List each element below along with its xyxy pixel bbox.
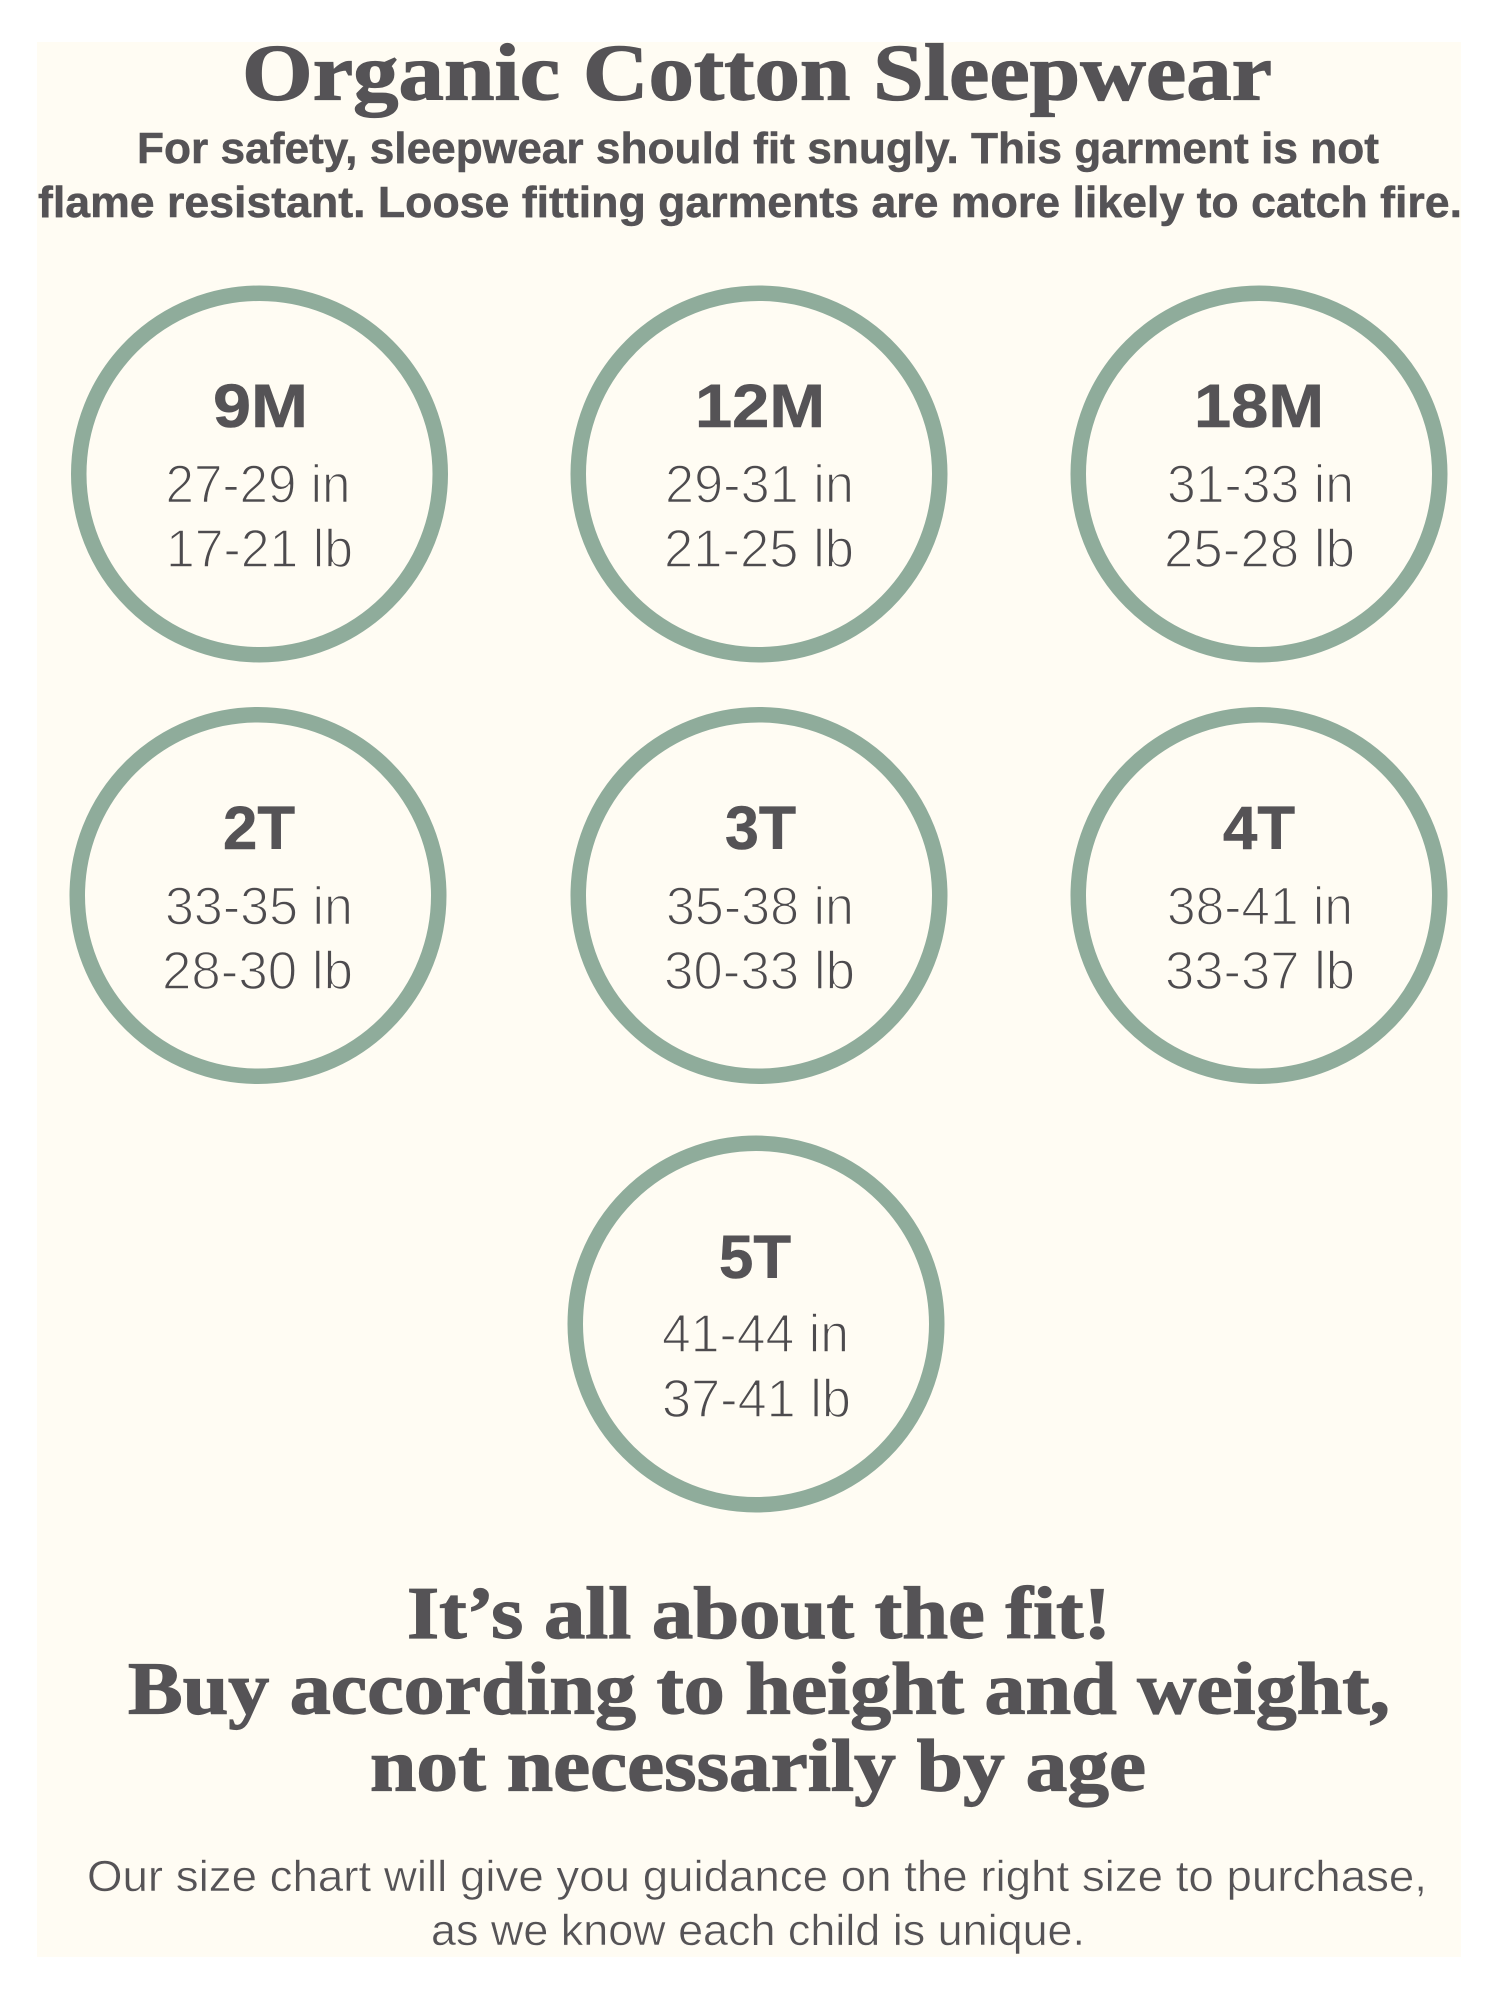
- size circle: 2T: 33-35 in: [165, 876, 353, 936]
- size circle: 18M: 31-33 in: [1167, 454, 1354, 514]
- size circle: 5T: [575, 1143, 937, 1505]
- size circle: 5T: 5T: [719, 1223, 791, 1291]
- size circle: 4T: 38-41 in: [1167, 876, 1353, 936]
- size circle: 12M: 12M: [695, 372, 825, 440]
- size circle: 5T: 37-41 lb: [662, 1369, 851, 1429]
- size circle: 5T: 41-44 in: [662, 1304, 849, 1364]
- size circle: 9M: 17-21 lb: [166, 519, 353, 579]
- size circle: 9M: 27-29 in: [166, 454, 350, 514]
- size circle: 3T: 30-33 lb: [664, 941, 855, 1001]
- size circle: 18M: [1078, 293, 1440, 655]
- size circle: 2T: [77, 715, 439, 1076]
- fit heading: not necessarily by age: [370, 1726, 1146, 1808]
- size chart guidance text: as we know each child is unique.: [431, 1906, 1085, 1955]
- fit heading: It’s all about the fit!: [407, 1573, 1111, 1655]
- size circle: 12M: [578, 293, 940, 655]
- title: Organic Cotton Sleepwear: [242, 30, 1272, 118]
- fit heading: [128, 1573, 1390, 1808]
- size circle: 18M: 18M: [1194, 372, 1324, 440]
- size circle: 12M: 21-25 lb: [664, 519, 854, 579]
- safety warning text: [38, 124, 1462, 227]
- size chart guidance text: [87, 1852, 1427, 1955]
- size circle: 9M: [79, 293, 440, 655]
- size circle: 9M: 9M: [213, 372, 308, 440]
- size circle: 4T: 33-37 lb: [1165, 941, 1355, 1001]
- size circle: 2T: 28-30 lb: [162, 941, 353, 1001]
- size circle: 4T: [1078, 715, 1440, 1076]
- size circle: 4T: 4T: [1223, 794, 1295, 862]
- safety warning text: For safety, sleepwear should fit snugly. This garment is not: [137, 124, 1379, 173]
- size circle: 3T: [578, 715, 940, 1076]
- size circle: 3T: 35-38 in: [666, 876, 854, 936]
- size chart guidance text: Our size chart will give you guidance on the right size to purchase,: [87, 1852, 1427, 1901]
- size circle: 3T: 3T: [725, 794, 796, 862]
- safety warning text: flame resistant. Loose fitting garments are more likely to catch fire.: [38, 178, 1462, 227]
- size circle: 2T: 2T: [223, 794, 295, 862]
- fit heading: Buy according to height and weight,: [128, 1648, 1390, 1730]
- size circle: 12M: 29-31 in: [665, 454, 854, 514]
- size circle: 18M: 25-28 lb: [1164, 519, 1355, 579]
